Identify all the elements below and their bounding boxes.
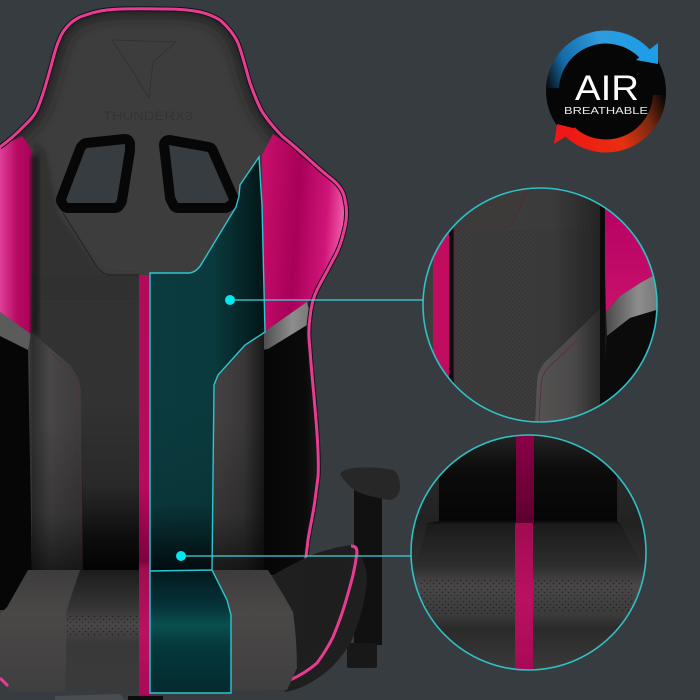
right gray band: [264, 302, 308, 350]
lower back base: [30, 302, 139, 550]
left panel: [32, 333, 83, 575]
right wing: [262, 134, 350, 332]
close-up seat leather: [411, 435, 647, 671]
close-up gray band: [606, 276, 656, 336]
center magenta stripe: [139, 275, 151, 695]
embossed logo: [103, 40, 193, 123]
cyan outline: [150, 157, 265, 693]
right panel: [212, 332, 264, 575]
seat left piping: [0, 678, 8, 686]
panel fade: [32, 470, 83, 570]
badge: air breathable: [546, 31, 666, 151]
center fade: [82, 469, 139, 570]
left of head seam shading: [34, 144, 106, 275]
seat right wing: [268, 545, 367, 692]
close-up right side shading: [617, 476, 642, 524]
icon: blue arrow: [552, 37, 658, 88]
close-up stripe upper: [516, 435, 534, 523]
piping: [0, 9, 346, 566]
right black side: [264, 325, 316, 575]
close-up perforation band: [420, 580, 516, 614]
highlighted breathable zone: [150, 157, 265, 693]
close-up side panel: [535, 309, 600, 425]
seat perforation band: [67, 615, 139, 637]
backrest upholstery: [0, 9, 346, 575]
close-up leather: [556, 190, 656, 360]
teal seat section: [150, 570, 231, 693]
embossed logo: THUNDERX3: [103, 109, 193, 123]
left black side: [0, 336, 32, 575]
close-up headrest stitch area: [450, 187, 530, 228]
badge subtitle: BREATHABLE: [564, 106, 648, 117]
left wing: [0, 136, 34, 334]
seat left corner: [0, 570, 30, 610]
leader line: upper callout: [225, 295, 423, 305]
seat body: [0, 570, 297, 692]
center perforated leather: [30, 275, 139, 520]
teal backrest section: [150, 157, 265, 571]
left gray band: [0, 312, 31, 350]
close-up black side: [605, 310, 656, 401]
close-up left side shading: [416, 478, 439, 524]
detail circle: seat junction close-up: [411, 435, 647, 673]
left headrest slot: [66, 144, 125, 203]
icon: red arrow: [554, 95, 660, 146]
badge title: AIR: [575, 69, 639, 108]
armrest: [340, 467, 400, 668]
side bolsters and panels: [0, 9, 350, 575]
head edge shading: [11, 11, 310, 308]
seat pink piping: [290, 546, 357, 680]
close-up perforation: [454, 230, 576, 421]
leader line: lower callout: [176, 551, 411, 561]
base below seat: [128, 696, 163, 700]
right headrest slot: [169, 145, 229, 203]
chair seat: [0, 545, 367, 700]
close-up magenta stripe: [433, 233, 449, 377]
headrest stitch: [63, 213, 139, 275]
close-up pink wing: [605, 208, 652, 312]
close-up stripe lower: [515, 523, 533, 673]
chair backrest: [0, 9, 350, 575]
seat center panel: [65, 570, 139, 692]
detail circle: upper backrest close-up: [423, 187, 660, 425]
